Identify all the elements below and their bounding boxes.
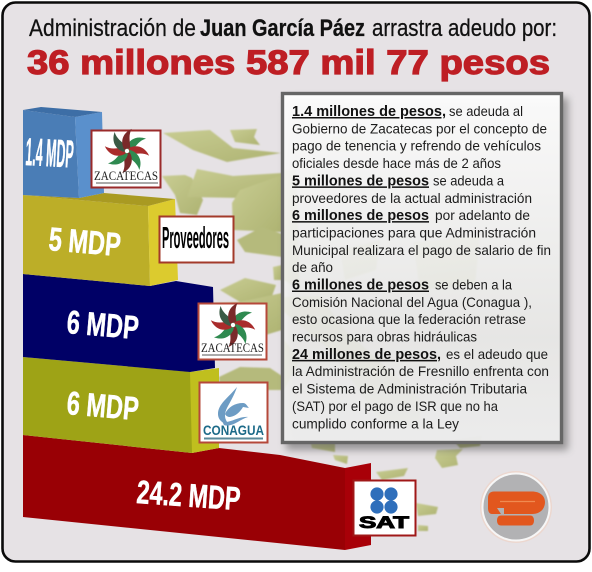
logo: Conagua: CONAGUA (203, 422, 264, 438)
item: 6 millones Conagua: recursos para obras hidráulicas (292, 328, 477, 344)
stacked bar: 6 MDP navy: 6 MDP (65, 303, 140, 346)
logo: Zacatecas second: ZACATECAS (201, 340, 264, 355)
item: 24 millones: (SAT) por el pago de ISR que no ha (292, 398, 498, 414)
item: 6 millones Conagua: 6 millones de pesos (292, 276, 429, 294)
item: 24 millones: el Sistema de Administración Tributaria (292, 381, 527, 397)
item: 6 millones Conagua (292, 276, 532, 344)
panel: debt details (282, 94, 562, 442)
item: 6 millones adelanto: participaciones para que Administración (292, 224, 536, 240)
title line: Juan García Páez (200, 15, 365, 42)
logo: SAT (354, 480, 416, 536)
title line (29, 15, 557, 42)
item: 6 millones Conagua: se deben a la (435, 276, 512, 292)
item: 6 millones Conagua: esto ocasiona que la federación retrase (292, 311, 526, 327)
item: 24 millones: cumplido conforme a la Ley (292, 415, 459, 431)
item: 1.4 millones: pago de tenencia y refrendo de vehículos (292, 138, 541, 154)
text panel shadow (286, 98, 568, 450)
item: 1.4 millones: 1.4 millones de pesos, (292, 103, 446, 120)
stacked bar: 1.4 MDP blue (23, 107, 104, 198)
label: Proveedores (160, 216, 234, 262)
title line: arrastra adeudo por: (372, 15, 557, 42)
title line: Administración de (29, 15, 196, 42)
item: 6 millones adelanto: Municipal realizara el pago de salario de fin (292, 242, 551, 258)
item: 1.4 millones: Gobierno de Zacatecas por el concepto de (292, 120, 547, 136)
item: 24 millones (292, 346, 549, 431)
falling money bills (162, 129, 482, 531)
item: 6 millones adelanto: de año (292, 259, 333, 275)
item: 5 millones: 5 millones de pesos (292, 172, 429, 189)
item: 24 millones: la Administración de Fresnillo enfrenta con (292, 363, 549, 379)
logo: Zacatecas second (198, 302, 266, 360)
stacked bar: 6 MDP olive (23, 357, 219, 453)
stacked bar: 6 MDP olive: 6 MDP (65, 384, 140, 427)
item: 5 millones (292, 172, 532, 206)
item: 5 millones: proveedores de la actual administración (292, 190, 532, 206)
item: 1.4 millones (292, 103, 547, 171)
stacked bar: 6 MDP navy (23, 274, 215, 372)
logo: SAT: SAT (359, 513, 410, 532)
stacked bar: 5 MDP yellow: 5 MDP (47, 220, 122, 263)
stacked bar: 24.2 MDP: 24.2 MDP (136, 473, 242, 517)
item: 6 millones adelanto: por adelanto de (435, 207, 530, 223)
item: 5 millones: se adeuda a (433, 172, 504, 188)
stacked bar: 5 MDP yellow (23, 193, 178, 286)
item: 1.4 millones: oficiales desde hace más de 2 años (292, 155, 501, 171)
logo: Zacatecas: ZACATECAS (94, 168, 158, 183)
logo: Zacatecas (92, 128, 160, 188)
text: Proveedores (162, 220, 229, 255)
logo: Conagua (200, 382, 268, 442)
item: 1.4 millones: se adeuda al (449, 103, 523, 119)
item: 6 millones adelanto (292, 207, 551, 275)
stacked bar: 1.4 MDP blue: 1.4 MDP (25, 131, 75, 176)
logo: publisher round badge (480, 471, 552, 543)
item: 24 millones: es el adeudo que (446, 346, 548, 362)
item: 24 millones: 24 millones de pesos, (292, 346, 441, 363)
total amount heading: 36 millones 587 mil 77 pesos (27, 44, 550, 82)
item: 6 millones adelanto: 6 millones de pesos (292, 207, 429, 224)
stacked bar: 24.2 MDP (23, 435, 371, 550)
item: 6 millones Conagua: Comisión Nacional del Agua (Conagua ), (292, 294, 532, 310)
